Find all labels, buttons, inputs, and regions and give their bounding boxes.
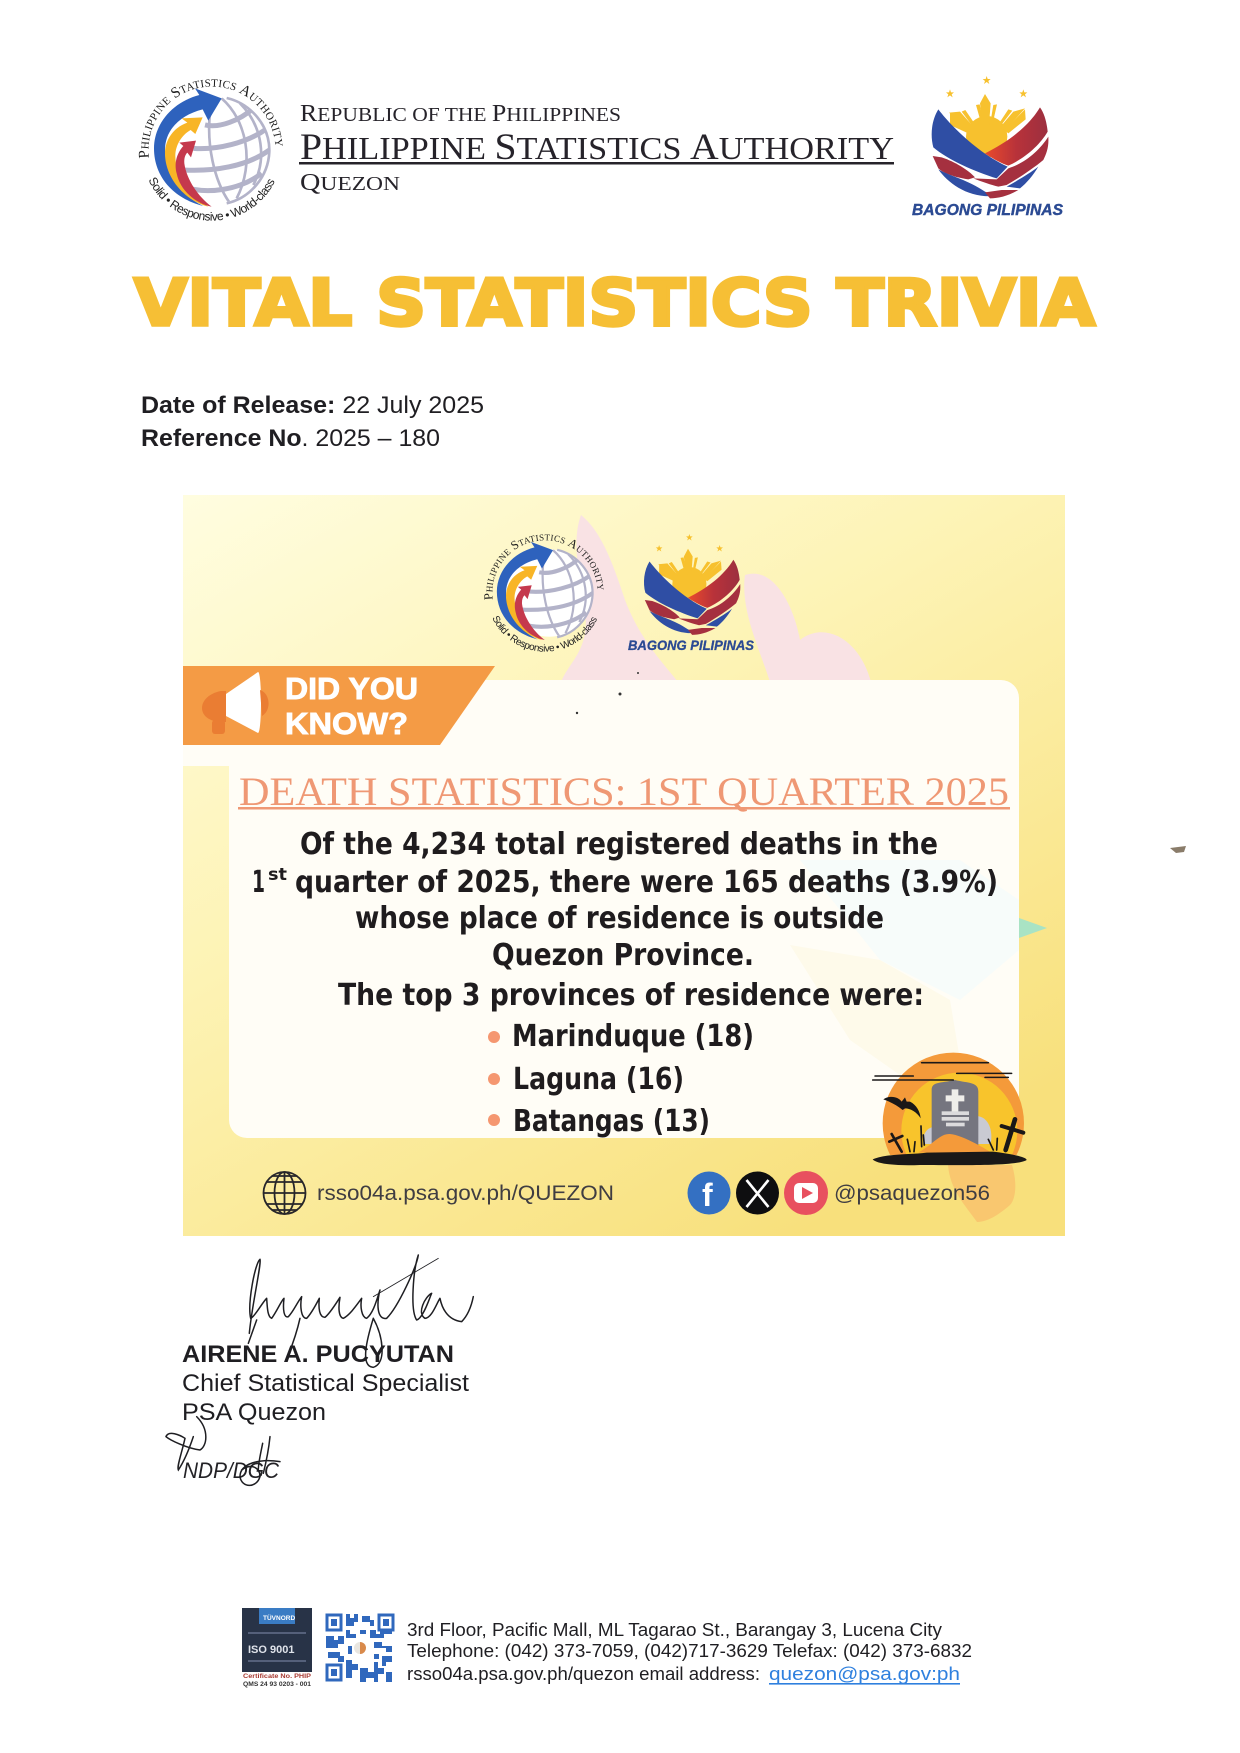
website link xyxy=(264,1172,614,1214)
footer: contact details: rsso04a.psa.gov.ph/quezon email address: xyxy=(407,1663,760,1684)
footer: contact details: 3rd Floor, Pacific Mall, ML Tagarao St., Barangay 3, Lucena City xyxy=(407,1619,943,1640)
footer: QR code xyxy=(326,1614,393,1682)
header: Bagong Pilipinas logo: BAGONG PILIPINAS xyxy=(912,202,1064,219)
icon: megaphone xyxy=(202,672,269,734)
small PSA logo: Solid • Responsive • World-class xyxy=(493,616,597,652)
website link: rsso04a.psa.gov.ph/QUEZON xyxy=(317,1182,614,1205)
footer: ISO certification badge: TÜVNORD xyxy=(263,1613,295,1622)
title: VITAL STATISTICS TRIVIA xyxy=(134,267,1096,341)
initials and typist reference xyxy=(166,1417,280,1485)
signatory block: Chief Statistical Specialist xyxy=(182,1370,469,1397)
header: agency name: QUEZON xyxy=(300,170,400,196)
body text: 1 xyxy=(252,865,265,900)
icon: youtube xyxy=(784,1171,828,1215)
header: agency name: REPUBLIC OF THE PHILIPPINES xyxy=(300,101,621,127)
small Bagong Pilipinas logo: BAGONG PILIPINAS xyxy=(628,638,754,653)
small PSA logo: Philippine Statistics Authority xyxy=(484,534,604,600)
signature xyxy=(248,1255,473,1367)
social media handles xyxy=(688,1171,990,1215)
footer: contact details xyxy=(407,1619,972,1685)
small PSA logo xyxy=(484,534,604,652)
icon: gravestone scene xyxy=(872,1052,1027,1166)
scan mark in right margin xyxy=(1170,846,1186,853)
banner: did you know xyxy=(183,666,495,745)
signatory block: AIRENE A. PUCYUTAN xyxy=(182,1341,454,1368)
list: top 3 provinces: Batangas (13) xyxy=(513,1104,710,1139)
header: Bagong Pilipinas logo xyxy=(912,76,1064,219)
signatory block xyxy=(182,1341,469,1426)
body text: Quezon Province. xyxy=(492,938,754,973)
initials and typist reference: NDP/DGC xyxy=(183,1458,279,1483)
icon: facebook: f xyxy=(702,1177,713,1213)
heading: death statistics: DEATH STATISTICS: 1ST QUARTER 2025 xyxy=(239,769,1009,814)
list: top 3 provinces: Marinduque (18) xyxy=(512,1019,754,1054)
small Bagong Pilipinas logo xyxy=(628,534,754,653)
footer: ISO certification badge: Certificate No. PHIP xyxy=(243,1673,312,1680)
icon: X xyxy=(736,1172,779,1214)
footer: ISO certification badge xyxy=(242,1608,312,1688)
background map: pink islands xyxy=(561,515,871,682)
banner: did you know: DID YOU xyxy=(285,671,418,706)
release date and reference number: Reference No. 2025 – 180 xyxy=(141,425,440,452)
body text: Of the 4,234 total registered deaths in the xyxy=(300,827,938,862)
footer: contact details: quezon@psa.gov:ph xyxy=(769,1663,960,1684)
icon: facebook xyxy=(688,1172,730,1214)
footer: ISO certification badge: ISO 9001 xyxy=(248,1644,294,1656)
panel: did you know infographic xyxy=(183,495,1065,1236)
signatory block: PSA Quezon xyxy=(182,1399,326,1426)
header: PSA logo: Philippine Statistics Authority xyxy=(138,79,283,158)
background map: pale blue and yellow regions xyxy=(790,860,1047,1222)
release date and reference number: Date of Release: 22 July 2025 xyxy=(141,392,484,419)
body text: The top 3 provinces of residence were: xyxy=(338,978,924,1013)
banner: did you know: KNOW? xyxy=(285,706,408,741)
header: PSA logo: Solid • Responsive • World-class xyxy=(149,178,274,221)
body text xyxy=(252,827,998,1013)
release date and reference number xyxy=(141,392,484,452)
body text: whose place of residence is outside xyxy=(355,901,884,936)
footer: contact details: Telephone: (042) 373-7059, (042)717-3629 Telefax: (042) 373-6832 xyxy=(407,1640,972,1661)
header: agency name xyxy=(299,101,894,196)
icon: globe xyxy=(264,1172,306,1214)
body text: quarter of 2025, there were 165 deaths (3.9%) xyxy=(295,865,998,900)
body text: st xyxy=(268,865,287,885)
social media handles: @psaquezon56 xyxy=(834,1182,990,1205)
footer: ISO certification badge: QMS 24 93 0203 - 001 xyxy=(243,1681,311,1688)
list: top 3 provinces: Laguna (16) xyxy=(513,1062,684,1097)
header: PSA logo xyxy=(138,79,283,221)
header: agency name: PHILIPPINE STATISTICS AUTHORITY xyxy=(300,127,894,168)
white content card xyxy=(183,680,1019,1138)
scan specks xyxy=(576,672,639,714)
list: top 3 provinces xyxy=(488,1019,754,1139)
